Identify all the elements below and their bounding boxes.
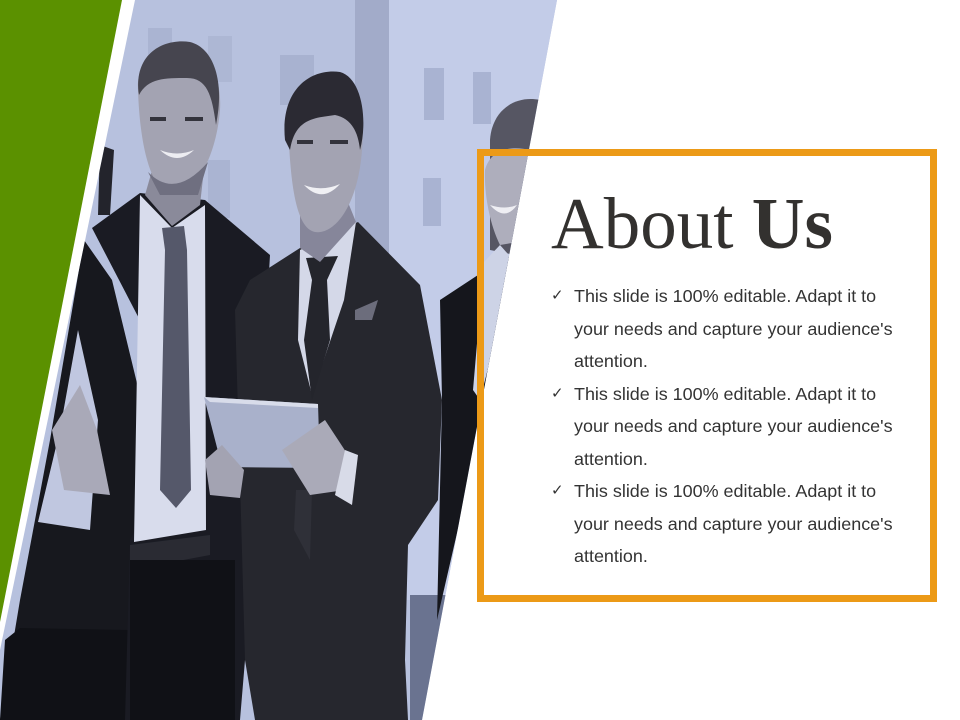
orange frame (477, 149, 937, 602)
bullet 3: attention. (574, 546, 648, 566)
bullet 2: ✓ (551, 384, 564, 402)
bullet 2 (551, 384, 893, 468)
bullet 1: ✓ (551, 286, 564, 304)
centre man (204, 72, 442, 720)
title: About Us (551, 183, 833, 264)
left woman (0, 146, 137, 720)
bullet 3: This slide is 100% editable. Adapt it to (574, 481, 876, 501)
left man (92, 41, 270, 720)
bullet list (551, 286, 893, 566)
bullet 2: your needs and capture your audience's (574, 416, 893, 436)
bullet 1: your needs and capture your audience's (574, 318, 893, 338)
bullet 1: This slide is 100% editable. Adapt it to (574, 286, 876, 306)
green diagonal band (0, 0, 122, 622)
team photo (0, 0, 560, 720)
bullet 2: attention. (574, 448, 648, 468)
bullet 1: attention. (574, 351, 648, 371)
photo collage with green band (0, 0, 557, 720)
bullet 3: your needs and capture your audience's (574, 514, 893, 534)
building background (0, 0, 560, 720)
bullet 3: ✓ (551, 481, 564, 499)
bullet 2: This slide is 100% editable. Adapt it to (574, 384, 876, 404)
right woman (437, 99, 540, 620)
bullet 1 (551, 286, 893, 371)
bullet 3 (551, 481, 893, 566)
